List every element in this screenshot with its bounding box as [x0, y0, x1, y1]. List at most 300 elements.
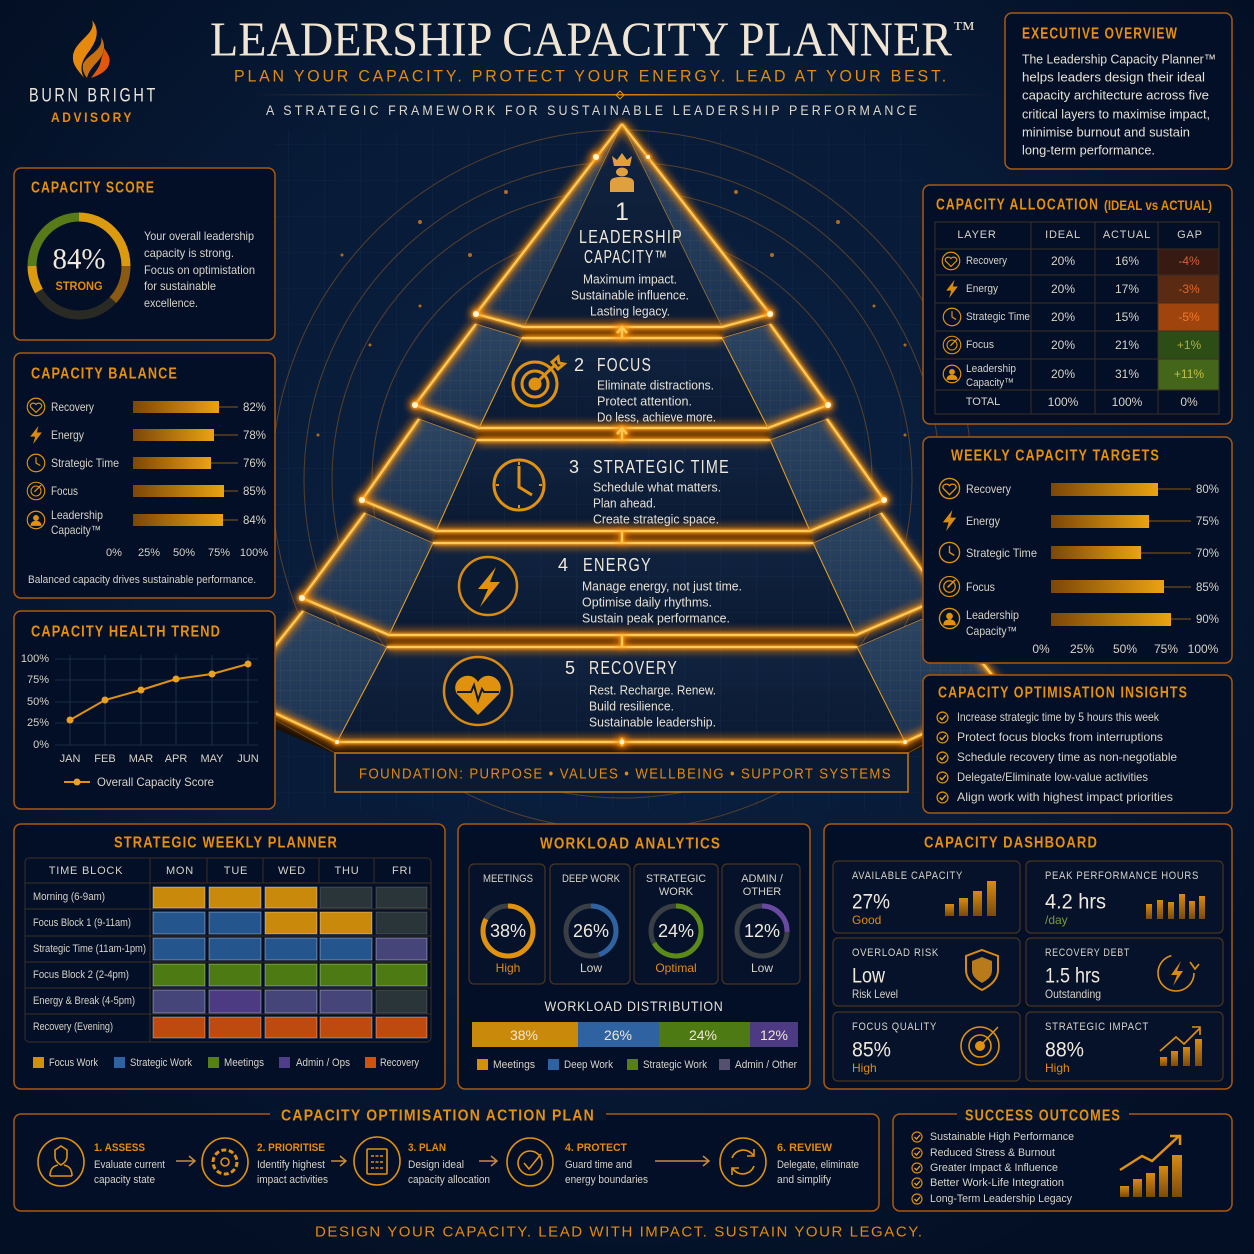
- allocation table: -4%: [1178, 254, 1200, 268]
- row: focus: [27, 482, 266, 500]
- planner legend: Admin / Ops: [296, 1057, 350, 1069]
- planner grid: Energy & Break (4-5pm): [33, 995, 135, 1007]
- tier 2 content: [513, 355, 716, 424]
- tier 4 description: Optimise daily rhythms.: [582, 594, 712, 610]
- insight 1: Increase strategic time by 5 hours this week: [957, 710, 1160, 724]
- heading: STRATEGIC WEEKLY PLANNER: [114, 834, 338, 852]
- planner grid: TIME BLOCK: [49, 865, 123, 877]
- panel: capacity dashboard: [824, 824, 1232, 1089]
- tier 2 description: Eliminate distractions.: [597, 378, 714, 392]
- row: recovery: 82%: [243, 400, 266, 414]
- card: meetings: MEETINGS: [483, 873, 533, 885]
- planner grid: WED: [278, 865, 306, 877]
- step 6 review: and simplify: [777, 1174, 831, 1186]
- allocation table: Capacity™: [966, 377, 1014, 389]
- allocation table: 21%: [1115, 338, 1139, 352]
- score text: capacity is strong.: [144, 246, 234, 260]
- allocation table: Energy: [966, 283, 998, 295]
- foundation plinth: [240, 700, 1005, 792]
- tier 5 structure: recovery: [236, 611, 1008, 755]
- heading: CAPACITY DASHBOARD: [924, 834, 1098, 852]
- heading: (IDEAL vs ACTUAL): [1104, 197, 1212, 213]
- brand sub: ADVISORY: [51, 109, 134, 125]
- card: available capacity: 27%: [852, 890, 890, 914]
- step 1 assess: 1. ASSESS: [94, 1142, 145, 1154]
- row: recovery: [27, 398, 266, 416]
- step 1 assess: Evaluate current: [94, 1159, 165, 1171]
- line chart: MAY: [200, 753, 224, 765]
- donut gauge: [32, 217, 126, 315]
- planner legend: Focus Work: [49, 1057, 98, 1069]
- tier 1 content: [571, 153, 689, 318]
- card: admin other: 12%: [744, 921, 780, 941]
- card: recovery debt: Outstanding: [1045, 987, 1101, 1001]
- icon: crowned leader: [610, 153, 634, 192]
- card: overload risk: [833, 938, 1020, 1006]
- row: energy: Energy: [51, 428, 84, 442]
- heading: CAPACITY BALANCE: [31, 366, 178, 382]
- axis labels: 100%: [1188, 642, 1219, 656]
- row: leadership capacity: 90%: [1196, 612, 1219, 626]
- card: focus quality: [833, 1012, 1020, 1081]
- panel: weekly capacity targets: [923, 437, 1232, 663]
- tier 2 heading: [574, 355, 652, 375]
- subtitle: PLAN YOUR CAPACITY. PROTECT YOUR ENERGY. LEAD AT YOUR BEST.: [234, 66, 949, 86]
- tier 2 description: Protect attention.: [597, 394, 692, 408]
- heading: CAPACITY OPTIMISATION INSIGHTS: [938, 684, 1188, 702]
- step 1 assess: capacity state: [94, 1174, 155, 1186]
- allocation table: 0%: [1180, 395, 1198, 409]
- tier 5 heading: [565, 658, 678, 678]
- card: deep work: DEEP WORK: [562, 873, 621, 885]
- step 3 plan: 3. PLAN: [408, 1142, 446, 1154]
- tier 1 description: Maximum impact.: [583, 272, 677, 286]
- brand name: BURN BRIGHT: [29, 86, 158, 106]
- allocation table: [935, 222, 1219, 414]
- row: leadership capacity: [27, 508, 266, 537]
- tier 2 heading: FOCUS: [597, 355, 652, 375]
- card: strategic work: [634, 864, 718, 984]
- card: available capacity: [833, 861, 1020, 933]
- card: overload risk: Low: [852, 964, 886, 988]
- allocation table: 100%: [1112, 395, 1143, 409]
- row: focus: Focus: [966, 580, 995, 594]
- central spine: [617, 327, 627, 746]
- tier 5 heading: 5: [565, 658, 575, 678]
- row: strategic time: 70%: [1196, 546, 1219, 560]
- line chart: JAN: [60, 753, 80, 765]
- tier 1 heading: [579, 227, 683, 267]
- distribution legend: Strategic Work: [643, 1059, 707, 1071]
- row: recovery: 80%: [1196, 482, 1219, 496]
- tier 1 number: 1: [615, 198, 629, 226]
- allocation table: TOTAL: [966, 396, 1000, 408]
- line chart: 75%: [27, 674, 49, 686]
- row: focus: Focus: [51, 484, 78, 498]
- axis labels: 0%: [106, 547, 122, 559]
- arrow: [479, 1156, 497, 1166]
- card: deep work: 26%: [573, 921, 609, 941]
- stacked bar: [472, 1022, 798, 1047]
- allocation table: +11%: [1174, 367, 1204, 381]
- axis labels: [1032, 642, 1219, 656]
- allocation table: 20%: [1051, 367, 1075, 381]
- tier 1 description: Lasting legacy.: [590, 304, 670, 318]
- card: peak performance hours: 4.2 hrs: [1045, 890, 1106, 914]
- panel: action plan: [14, 1108, 879, 1211]
- row: leadership capacity: Leadership: [966, 608, 1019, 622]
- allocation table: 16%: [1115, 254, 1139, 268]
- score text: for sustainable: [144, 279, 216, 293]
- planner grid: Focus Block 2 (2-4pm): [33, 969, 129, 981]
- outcome 4: Better Work-Life Integration: [930, 1177, 1064, 1189]
- allocation table: 20%: [1051, 254, 1075, 268]
- line chart: 25%: [27, 717, 49, 729]
- step 3 plan: Design ideal: [408, 1159, 464, 1171]
- tier 1 structure: leadership capacity: [476, 124, 770, 327]
- card: meetings: High: [496, 961, 520, 975]
- planner grid: FRI: [392, 865, 412, 877]
- panel: strategic weekly planner: [14, 824, 445, 1089]
- card: strategic impact: [1026, 1012, 1223, 1081]
- panel: capacity health trend: [14, 611, 275, 809]
- card: recovery debt: RECOVERY DEBT: [1045, 947, 1130, 959]
- axis labels: 50%: [173, 547, 195, 559]
- row: focus: 85%: [1196, 580, 1219, 594]
- allocation table: GAP: [1177, 229, 1203, 241]
- tier 2 description: Do less, achieve more.: [597, 410, 716, 424]
- tier 4 heading: [558, 555, 652, 575]
- score label: STRONG: [56, 279, 102, 293]
- panel: capacity allocation: [923, 185, 1232, 424]
- chart legend: Overall Capacity Score: [97, 775, 214, 789]
- card: overload risk: OVERLOAD RISK: [852, 947, 939, 959]
- heading: EXECUTIVE OVERVIEW: [1022, 26, 1178, 42]
- panel: capacity score: [14, 168, 275, 340]
- allocation table: LAYER: [957, 229, 997, 241]
- axis labels: 25%: [1070, 642, 1094, 656]
- card: focus quality: 85%: [852, 1038, 891, 1062]
- allocation table: 31%: [1115, 367, 1139, 381]
- distribution legend: Meetings: [493, 1059, 535, 1071]
- line chart: [21, 653, 259, 765]
- allocation table: 20%: [1051, 310, 1075, 324]
- balance footnote: Balanced capacity drives sustainable performance.: [28, 574, 256, 586]
- planner grid: Recovery (Evening): [33, 1021, 113, 1033]
- pyramid: [236, 124, 1008, 755]
- icon: target: [513, 357, 564, 406]
- tier 5 description: Build resilience.: [589, 698, 674, 714]
- stacked bar: 24%: [689, 1027, 717, 1043]
- tier 5 description: Rest. Recharge. Renew.: [589, 682, 716, 698]
- tier 3 content: [494, 457, 730, 526]
- score text: excellence.: [144, 296, 198, 310]
- heading: CAPACITY ALLOCATION: [936, 196, 1099, 214]
- planner grid: Focus Block 1 (9-11am): [33, 917, 131, 929]
- row: leadership capacity: [939, 608, 1219, 638]
- overview text: helps leaders design their ideal: [1022, 70, 1205, 84]
- row: energy: Energy: [966, 514, 1000, 528]
- step 1 assess: [38, 1138, 165, 1186]
- panel: workload analytics: [458, 824, 810, 1089]
- planner legend: Recovery: [380, 1057, 419, 1069]
- tier 3 structure: strategic time: [362, 419, 884, 531]
- tier 3 description: [593, 480, 721, 526]
- tier 3 heading: 3: [569, 457, 579, 477]
- allocation table: Strategic Time: [966, 311, 1030, 323]
- arrow: [331, 1156, 346, 1166]
- score text: Focus on optimistation: [144, 263, 255, 277]
- tier 1 description: Sustainable influence.: [571, 288, 689, 302]
- allocation table: Focus: [966, 339, 994, 351]
- workload distribution heading: WORKLOAD DISTRIBUTION: [544, 998, 724, 1014]
- outcome 1: Sustainable High Performance: [930, 1131, 1074, 1143]
- title divider: [248, 91, 996, 99]
- card: strategic work: 24%: [658, 921, 694, 941]
- row: recovery: Recovery: [51, 400, 94, 414]
- tier 3 description: Create strategic space.: [593, 512, 719, 526]
- heading: WORKLOAD ANALYTICS: [540, 836, 721, 852]
- stacked bar: 38%: [510, 1027, 538, 1043]
- planner legend: Meetings: [224, 1057, 264, 1069]
- tier 4 heading: ENERGY: [583, 555, 652, 575]
- insight 2: Protect focus blocks from interruptions: [957, 730, 1163, 744]
- icon: heart: [444, 657, 512, 725]
- planner grid: TUE: [224, 865, 248, 877]
- planner legend: [33, 1057, 419, 1069]
- allocation table: -3%: [1178, 282, 1200, 296]
- distribution legend: [477, 1059, 797, 1071]
- line chart: FEB: [94, 753, 116, 765]
- logo: [29, 20, 158, 125]
- step 4 protect: Guard time and: [565, 1159, 632, 1171]
- card: peak performance hours: [1026, 861, 1223, 933]
- foundation text: FOUNDATION: PURPOSE • VALUES • WELLBEING • SUPPORT SYSTEMS: [359, 766, 892, 782]
- line chart: 50%: [27, 696, 49, 708]
- heading: CAPACITY SCORE: [31, 180, 155, 196]
- glowing nodes: [299, 154, 907, 744]
- row: recovery: [939, 478, 1219, 499]
- overview text: The Leadership Capacity Planner™: [1022, 52, 1216, 66]
- line chart: 100%: [21, 653, 49, 665]
- row: recovery: Recovery: [966, 482, 1011, 496]
- overview text: long-term performance.: [1022, 142, 1155, 158]
- card: meetings: 38%: [490, 921, 526, 941]
- stacked bar: 26%: [604, 1027, 632, 1043]
- card: available capacity: Good: [852, 913, 881, 927]
- planner legend: Strategic Work: [130, 1057, 192, 1069]
- arrow: [176, 1156, 195, 1166]
- axis labels: 75%: [1154, 642, 1178, 656]
- tier 5 content: [444, 657, 716, 730]
- card: admin other: ADMIN /: [741, 873, 784, 885]
- step 3 plan: capacity allocation: [408, 1174, 490, 1186]
- icon: lightning: [459, 557, 517, 615]
- arrow: [655, 1156, 709, 1166]
- planner grid: MON: [166, 865, 194, 877]
- row: strategic time: [27, 454, 266, 472]
- tier 1 heading: LEADERSHIP: [579, 227, 683, 247]
- tier 3 heading: STRATEGIC TIME: [593, 457, 730, 477]
- overview text: minimise burnout and sustain: [1022, 124, 1190, 140]
- allocation table: 100%: [1048, 395, 1079, 409]
- tier 4 description: Manage energy, not just time.: [582, 578, 742, 594]
- tier 1 description: [571, 272, 689, 318]
- heading: SUCCESS OUTCOMES: [965, 1108, 1121, 1124]
- step 6 review: Delegate, eliminate: [777, 1159, 859, 1171]
- overview text: [1022, 52, 1216, 158]
- allocation table: Recovery: [966, 255, 1007, 267]
- axis labels: 0%: [1032, 642, 1050, 656]
- card: peak performance hours: PEAK PERFORMANCE HOURS: [1045, 870, 1199, 882]
- tier 4 description: [582, 578, 742, 626]
- planner grid: Morning (6-9am): [33, 891, 105, 903]
- background radial blueprint: [272, 130, 972, 830]
- card: deep work: [550, 864, 630, 984]
- step 2 prioritise: [202, 1138, 328, 1186]
- row: energy: [943, 510, 1219, 531]
- card: admin other: [722, 864, 800, 984]
- planner grid: [25, 858, 431, 1042]
- tier 3 description: Schedule what matters.: [593, 480, 721, 494]
- step 2 prioritise: Identify highest: [257, 1159, 325, 1171]
- row: leadership capacity: Capacity™: [966, 624, 1017, 638]
- allocation table: 20%: [1051, 282, 1075, 296]
- row: energy: 75%: [1196, 514, 1219, 528]
- tier 5 heading: RECOVERY: [589, 658, 678, 678]
- line chart: JUN: [237, 753, 259, 765]
- score value: 84%: [52, 242, 106, 276]
- card: meetings: [469, 864, 545, 984]
- row: strategic time: Strategic Time: [51, 456, 119, 470]
- step 6 review: [720, 1138, 859, 1186]
- row: strategic time: Strategic Time: [966, 546, 1037, 560]
- card: available capacity: AVAILABLE CAPACITY: [852, 870, 963, 882]
- outcome 5: Long-Term Leadership Legacy: [930, 1193, 1072, 1205]
- card: strategic work: Optimal: [655, 961, 697, 975]
- row: energy: [30, 426, 266, 444]
- planner grid: Strategic Time (11am-1pm): [33, 943, 146, 955]
- step 4 protect: 4. PROTECT: [565, 1142, 627, 1154]
- step 6 review: 6. REVIEW: [777, 1142, 833, 1154]
- tier 5 description: [589, 682, 716, 730]
- growth chart icon: [1120, 1136, 1182, 1197]
- heading: WEEKLY CAPACITY TARGETS: [951, 448, 1160, 464]
- step 4 protect: [507, 1138, 648, 1186]
- card: strategic work: WORK: [659, 886, 694, 898]
- row: strategic time: [939, 542, 1219, 563]
- card: overload risk: Risk Level: [852, 987, 898, 1001]
- title: LEADERSHIP CAPACITY PLANNER: [210, 12, 952, 66]
- allocation table: 17%: [1115, 282, 1139, 296]
- allocation table: 20%: [1051, 338, 1075, 352]
- panel: capacity balance: [14, 353, 275, 598]
- outcome 3: Greater Impact & Influence: [930, 1162, 1058, 1174]
- card: recovery debt: 1.5 hrs: [1045, 964, 1100, 988]
- icon: clock: [494, 460, 544, 510]
- axis labels: 75%: [208, 547, 230, 559]
- card: deep work: Low: [580, 961, 602, 975]
- panel: success outcomes: [893, 1108, 1232, 1211]
- row: energy: 78%: [243, 428, 266, 442]
- tier 2 description: [597, 378, 716, 424]
- line chart: APR: [165, 753, 187, 765]
- tagline: A STRATEGIC FRAMEWORK FOR SUSTAINABLE LEADERSHIP PERFORMANCE: [266, 102, 920, 118]
- axis labels: 50%: [1113, 642, 1137, 656]
- tier 4 content: [459, 555, 742, 626]
- heading: CAPACITY HEALTH TREND: [31, 624, 221, 640]
- insight 5: Align work with highest impact priorities: [957, 790, 1173, 804]
- tier 5 description: Sustainable leadership.: [589, 714, 716, 730]
- allocation table: +1%: [1177, 338, 1202, 352]
- tier 3 heading: [569, 457, 730, 477]
- stacked bar: 12%: [760, 1027, 788, 1043]
- axis labels: [106, 547, 268, 559]
- axis labels: 100%: [240, 547, 268, 559]
- allocation table: IDEAL: [1045, 229, 1081, 241]
- card: strategic work: STRATEGIC: [646, 873, 706, 885]
- insight 3: Schedule recovery time as non-negotiable: [957, 750, 1177, 764]
- card: admin other: OTHER: [743, 886, 781, 898]
- row: leadership capacity: 84%: [243, 513, 266, 527]
- tier 4 description: Sustain peak performance.: [582, 610, 730, 626]
- card: strategic impact: High: [1045, 1061, 1070, 1075]
- row: leadership capacity: Capacity™: [51, 523, 101, 537]
- tier 3 description: Plan ahead.: [593, 496, 656, 510]
- insight 4: Delegate/Eliminate low-value activities: [957, 770, 1148, 784]
- score text: [144, 229, 255, 310]
- card: peak performance hours: /day: [1045, 913, 1068, 927]
- row: focus: [939, 576, 1219, 597]
- panel: executive overview: [1005, 13, 1232, 169]
- tier 4 structure: energy: [302, 513, 942, 635]
- footer tagline: DESIGN YOUR CAPACITY. LEAD WITH IMPACT. SUSTAIN YOUR LEGACY.: [315, 1224, 925, 1240]
- title: ™: [953, 18, 975, 40]
- step 3 plan: [354, 1137, 490, 1186]
- outcome 2: Reduced Stress & Burnout: [930, 1147, 1055, 1159]
- row: leadership capacity: Leadership: [51, 508, 103, 522]
- card: strategic impact: 88%: [1045, 1038, 1084, 1062]
- row: strategic time: 76%: [243, 456, 266, 470]
- step 2 prioritise: impact activities: [257, 1174, 328, 1186]
- card: admin other: Low: [751, 961, 773, 975]
- score text: Your overall leadership: [144, 229, 254, 243]
- card: focus quality: High: [852, 1061, 877, 1075]
- planner grid: THU: [334, 865, 360, 877]
- overview text: capacity architecture across five: [1022, 88, 1209, 102]
- allocation table: -5%: [1178, 310, 1200, 324]
- card: recovery debt: [1026, 938, 1223, 1006]
- card: focus quality: FOCUS QUALITY: [852, 1021, 937, 1033]
- line chart: MAR: [129, 753, 153, 765]
- tier 4 heading: 4: [558, 555, 568, 575]
- panel: capacity optimisation insights: [923, 675, 1232, 813]
- distribution legend: Deep Work: [564, 1059, 613, 1071]
- axis labels: 25%: [138, 547, 160, 559]
- tier 2 structure: focus: [415, 324, 828, 428]
- tier 2 heading: 2: [574, 355, 584, 375]
- heading: CAPACITY OPTIMISATION ACTION PLAN: [281, 1108, 595, 1124]
- step 4 protect: energy boundaries: [565, 1174, 648, 1186]
- card: strategic impact: STRATEGIC IMPACT: [1045, 1021, 1149, 1033]
- tier 1 heading: CAPACITY™: [584, 247, 668, 267]
- icon: flame: [73, 20, 110, 78]
- allocation table: Leadership: [966, 363, 1016, 375]
- line chart: 0%: [33, 739, 49, 751]
- overview text: critical layers to maximise impact,: [1022, 106, 1210, 122]
- allocation table: ACTUAL: [1103, 229, 1151, 241]
- distribution legend: Admin / Other: [735, 1059, 797, 1071]
